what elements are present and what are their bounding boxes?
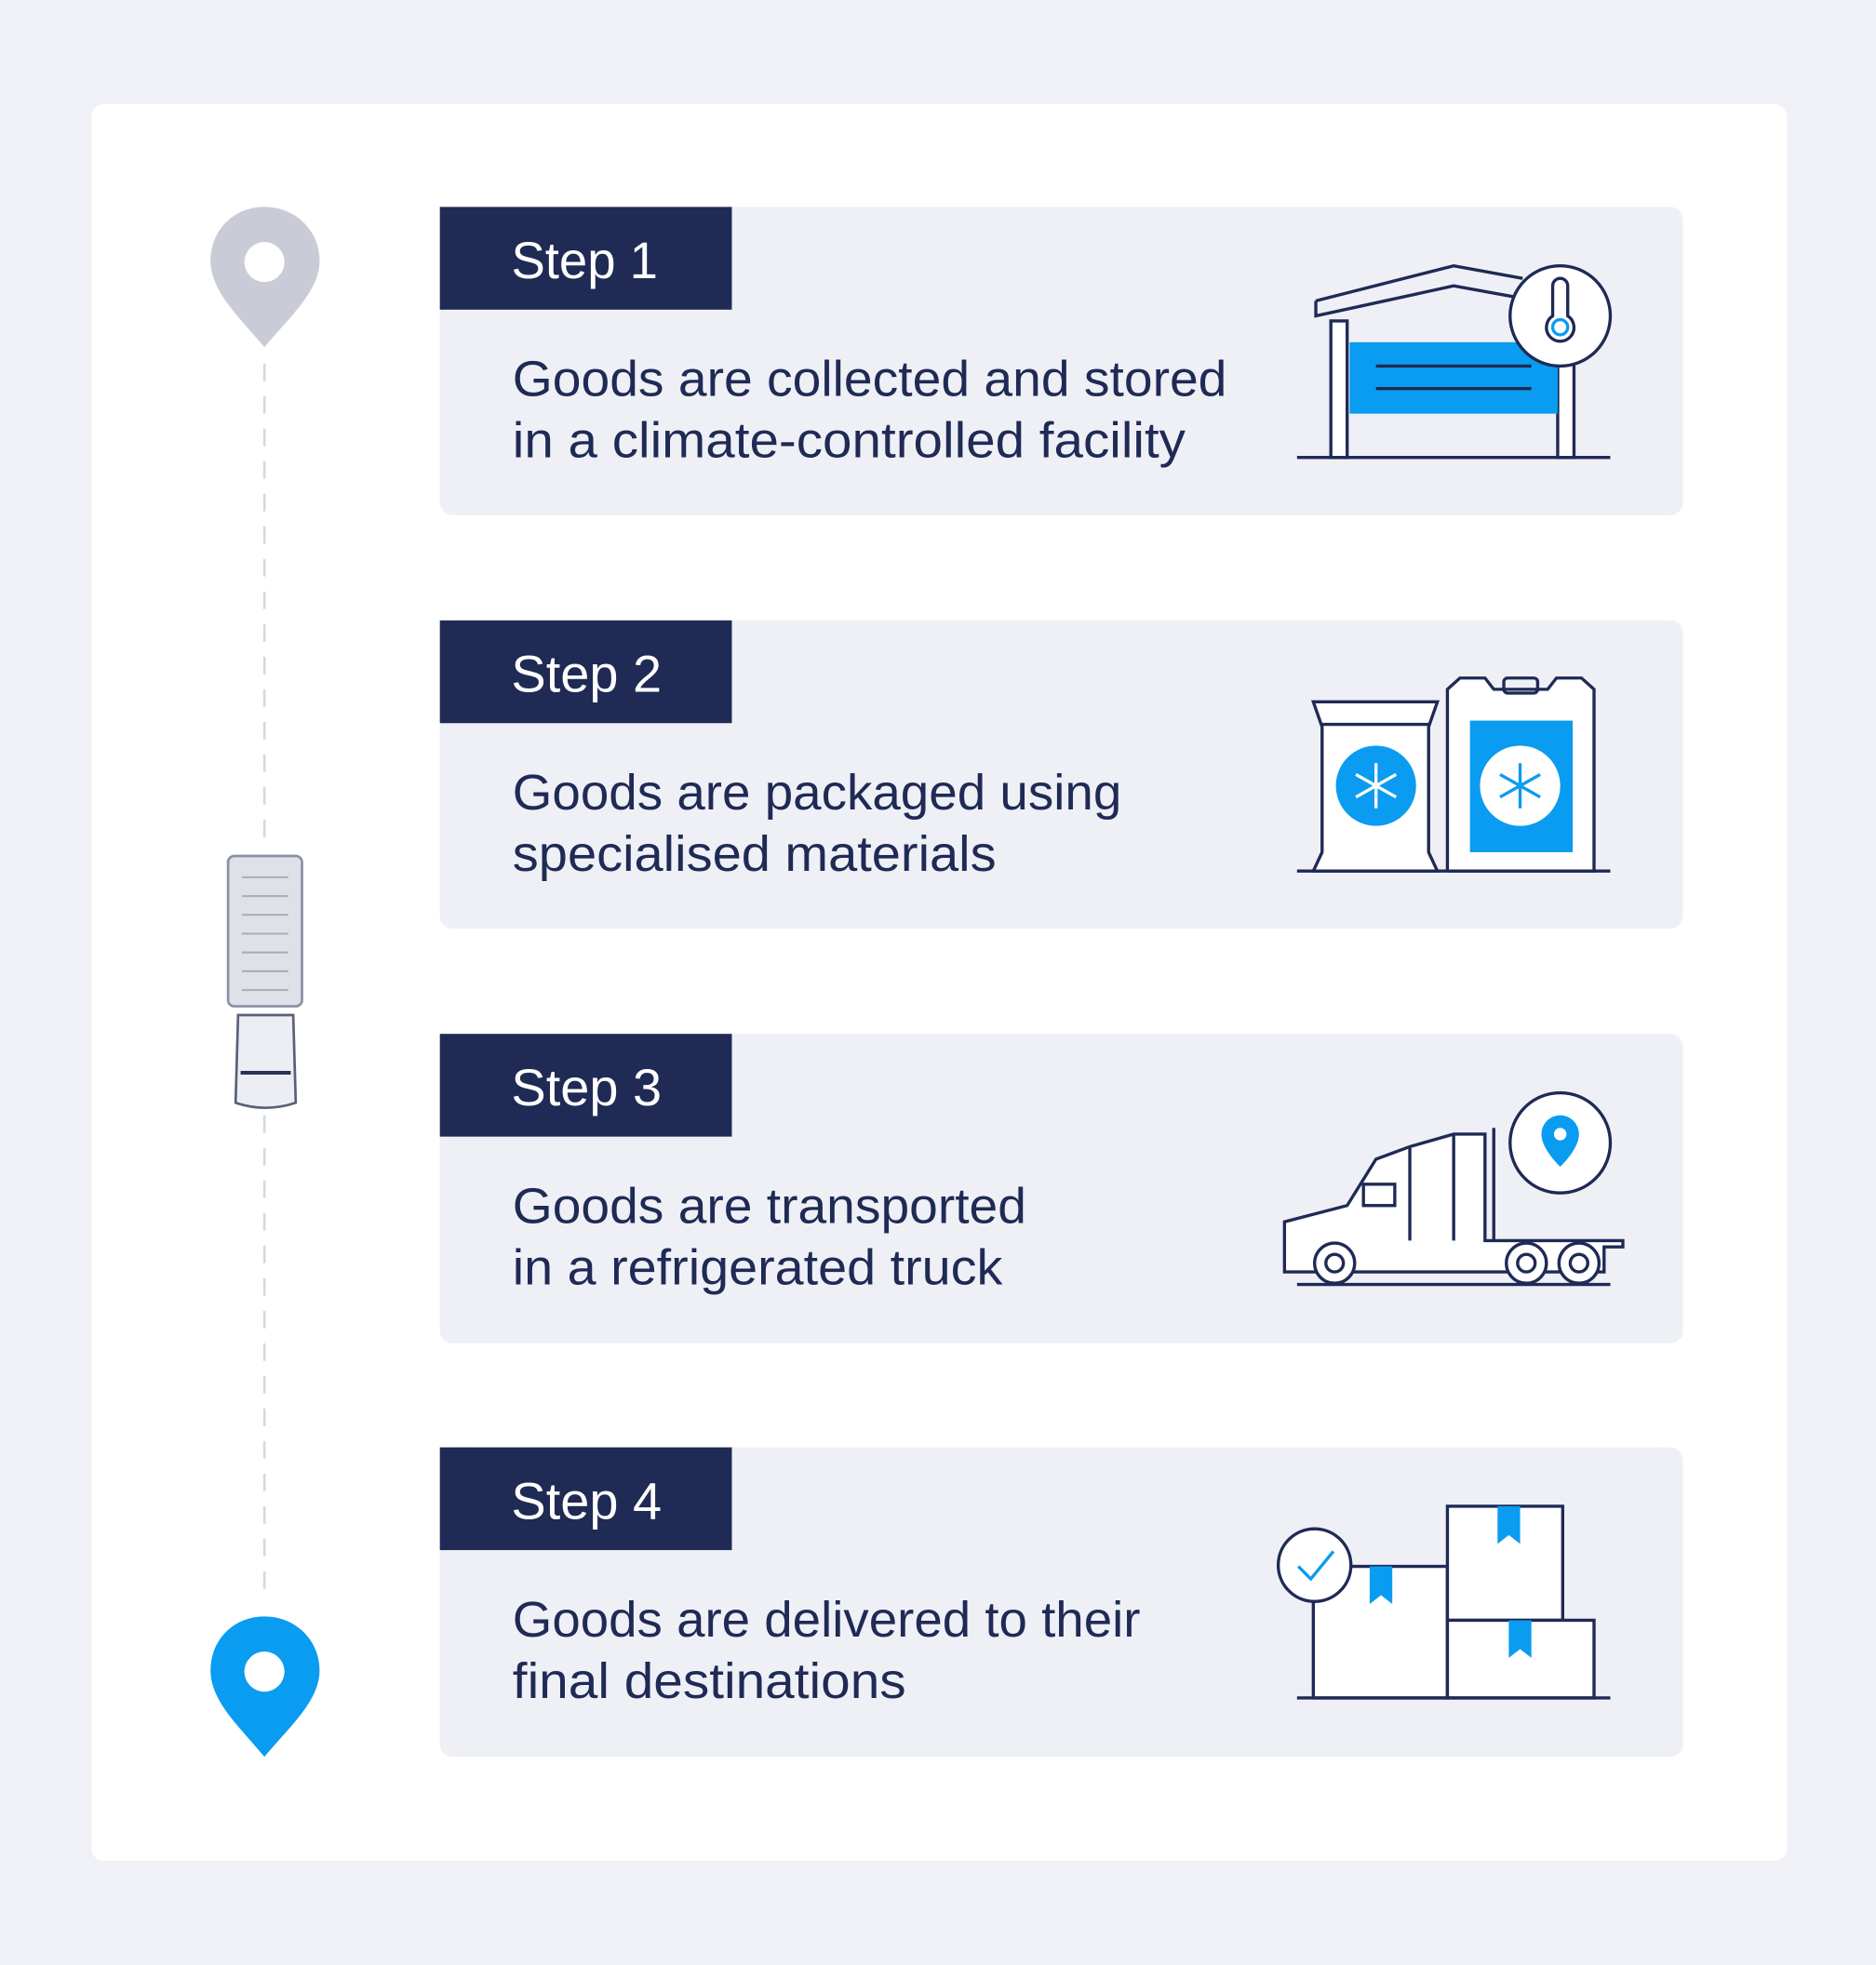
icon: refrigerated truck [1284, 1093, 1623, 1285]
step 2 description: specialised materials [513, 826, 997, 882]
step 3 label: Step 3 [511, 1059, 662, 1116]
step 3 description: Goods are transported [513, 1179, 1026, 1235]
step 2 label [440, 621, 731, 723]
icon: insulated packaging [1297, 678, 1611, 871]
panel: step 1 [440, 207, 1683, 515]
icon: climate-controlled warehouse [1297, 266, 1611, 458]
panel: step 3 [440, 1034, 1683, 1343]
icon: delivered boxes [1279, 1506, 1611, 1698]
step 2 label: Step 2 [511, 646, 662, 703]
icon: truck on route [228, 856, 302, 1108]
panel: step 2 [440, 621, 1683, 929]
step 1 label [440, 207, 731, 310]
step 4 description: Goods are delivered to their [513, 1592, 1141, 1648]
step 2 description: Goods are packaged using [513, 765, 1121, 821]
step 4 label [440, 1448, 731, 1550]
step 1 description: Goods are collected and stored [513, 352, 1226, 408]
route line [263, 364, 265, 1604]
step 1 description: in a climate-controlled facility [513, 413, 1186, 469]
panel: step 4 [440, 1448, 1683, 1757]
step 3 description: in a refrigerated truck [513, 1240, 1003, 1296]
icon: end pin [210, 1616, 319, 1757]
step 4 description: final destinations [513, 1653, 906, 1709]
step 3 label [440, 1034, 731, 1137]
icon: start pin [210, 207, 319, 347]
step 1 label: Step 1 [511, 232, 658, 289]
step 4 label: Step 4 [511, 1472, 662, 1530]
